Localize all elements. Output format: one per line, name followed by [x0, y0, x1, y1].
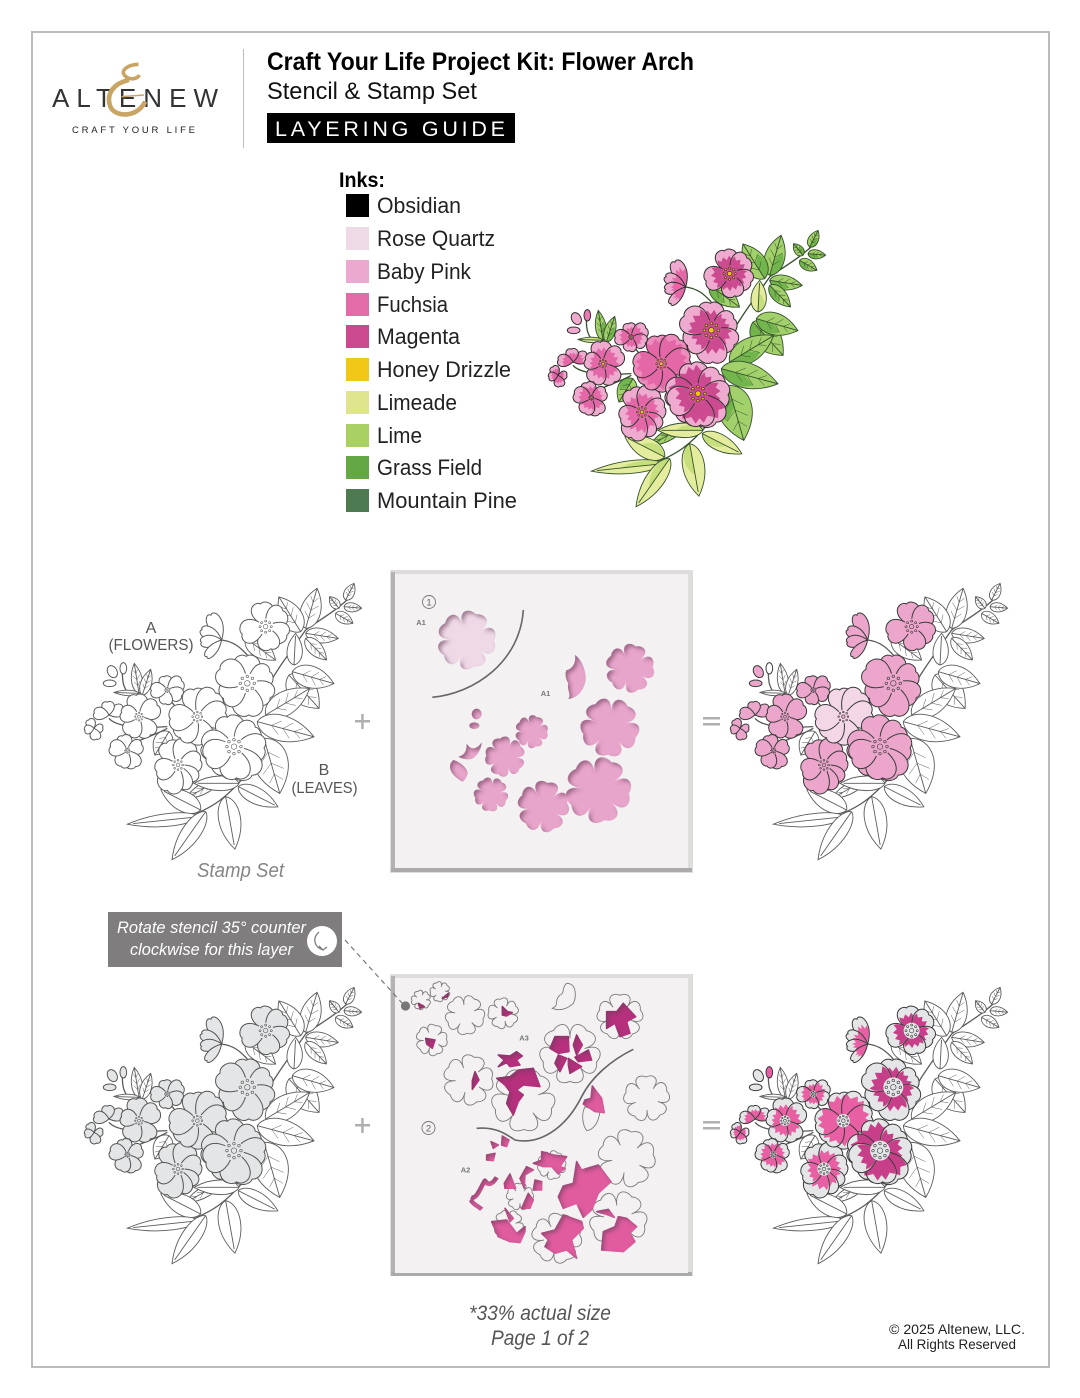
step number 2: 2 [426, 1124, 431, 1134]
dashed leader line [345, 940, 402, 1003]
subtitle: Stencil & Stamp Set [267, 78, 477, 105]
ink: Lime: Lime [377, 423, 422, 448]
title: Craft Your Life Project Kit: Flower Arch [267, 48, 694, 76]
step number 1: 1 [426, 598, 432, 608]
copyright [889, 1321, 1025, 1352]
registration dot [401, 1001, 410, 1011]
stencil label A2: A2 [461, 1166, 470, 1174]
ink: Fuchsia [346, 292, 448, 317]
ink: Limeade [346, 390, 457, 415]
label: B leaves [292, 762, 358, 797]
header divider [243, 49, 244, 148]
label: A flowers [108, 620, 194, 654]
copyright: © 2025 Altenew, LLC. [889, 1321, 1025, 1337]
stencil label A1: A1 [416, 618, 426, 627]
note: actual size: *33% actual size [469, 1302, 611, 1325]
cutout: rose quartz layer A1 [429, 603, 504, 677]
finished full-colour floral illustration [548, 228, 826, 512]
copyright: All Rights Reserved [898, 1336, 1016, 1352]
stencil label A1: A1 [541, 689, 550, 698]
ink: Grass Field: Grass Field [377, 455, 482, 480]
logo gold ampersand [109, 64, 145, 114]
logo: Altenew [52, 64, 218, 136]
row 2 stamp line art with grey flowers [84, 985, 362, 1269]
callout: rotate stencil [108, 912, 342, 967]
ink: Rose Quartz: Rose Quartz [377, 226, 495, 251]
equals sign row 2 [703, 1121, 720, 1130]
ink: Lime [346, 423, 422, 448]
callout text: clockwise for this layer [130, 941, 294, 959]
callout text: Rotate stencil 35° counter [117, 919, 308, 937]
row 2 result: second ink layer [730, 985, 1008, 1269]
inks heading: Inks: [339, 168, 385, 192]
plus sign row 1 [355, 714, 370, 729]
label: A flowers: (FLOWERS) [108, 637, 194, 654]
ink: Honey Drizzle: Honey Drizzle [377, 357, 511, 382]
page number: Page 1 of 2 [491, 1327, 589, 1350]
ink: Magenta: Magenta [377, 324, 460, 349]
stencil 2 marks [409, 978, 676, 1266]
registration outlines [409, 978, 676, 1266]
label: A flowers: A [146, 620, 157, 637]
logo tagline: CRAFT YOUR LIFE [72, 125, 195, 136]
row 1 result: stamped base layer [730, 581, 1008, 865]
ink: Mountain Pine: Mountain Pine [377, 488, 517, 513]
badge: layering guide: LAYERING GUIDE [275, 117, 505, 141]
caption: stamp set: Stamp Set [197, 859, 285, 882]
ink: Limeade: Limeade [377, 390, 457, 415]
stencil panel 1 [390, 570, 693, 873]
ink: Baby Pink: Baby Pink [377, 259, 472, 284]
inks legend [339, 168, 517, 513]
callout text [117, 919, 308, 959]
row 1 stamp set line art [84, 581, 362, 865]
cutouts: fuchsia layer A2 [471, 1086, 637, 1258]
stencil 1 marks [429, 603, 660, 836]
step number 1 [422, 596, 436, 608]
stencil label A3: A3 [519, 1034, 529, 1042]
plus sign row 2 [355, 1118, 370, 1133]
cutouts: magenta layer A3 [418, 993, 636, 1115]
cutouts: baby pink layer A1 [450, 639, 660, 836]
equals sign row 1 [703, 717, 720, 726]
ink: Obsidian: Obsidian [377, 193, 461, 218]
icon: rotate arrow [307, 926, 337, 956]
step number 2 [422, 1122, 435, 1134]
ink: Fuchsia: Fuchsia [377, 292, 448, 317]
label: B leaves: B [319, 762, 329, 779]
logo wordmark: ALTENEW [52, 83, 218, 113]
stencil panel 2 [390, 974, 693, 1276]
label: B leaves: (LEAVES) [292, 780, 358, 797]
